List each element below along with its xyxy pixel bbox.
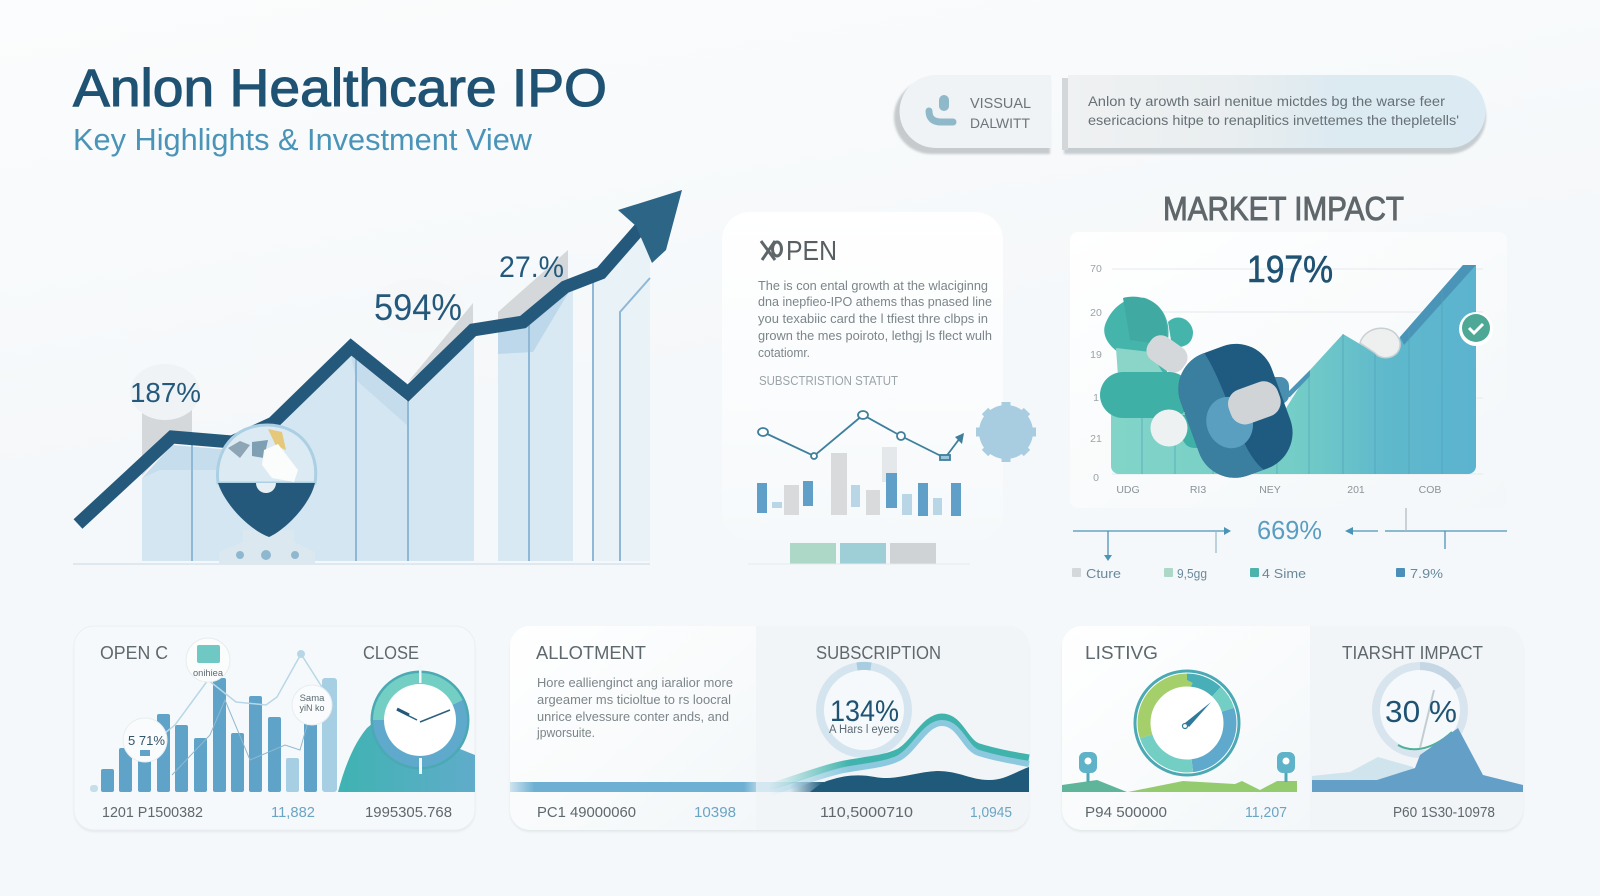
x axis labels <box>1116 484 1441 496</box>
figures: 11,207 <box>1245 804 1287 821</box>
legend: 4 Sime <box>1262 566 1306 581</box>
paragraph: you texabiic card the l tfiest thre clbps in <box>758 312 988 326</box>
figures: 1201 P1500382 <box>102 804 203 821</box>
x axis labels: UDG <box>1116 484 1140 496</box>
icon: clock <box>372 665 468 774</box>
label: listing: LISTIVG <box>1085 643 1158 663</box>
paragraph: Hore eallienginct ang iaralior more <box>537 676 733 690</box>
subheading: SUBSCTRISTION STATUT <box>759 374 898 388</box>
area bars <box>142 218 650 561</box>
mountain chart <box>1312 690 1523 792</box>
icon: pin emblem <box>218 425 316 564</box>
arrows <box>1073 508 1507 561</box>
bar chart: open <box>90 650 337 792</box>
y axis labels: 1 <box>1093 392 1099 404</box>
figures <box>537 804 1012 821</box>
figures: 11,882 <box>271 804 315 821</box>
panel: open <box>722 212 1003 564</box>
label: close: CLOSE <box>363 643 419 663</box>
wave chart <box>769 717 1029 793</box>
figures: 110,5000710 <box>820 804 913 821</box>
legend: Cture <box>1086 566 1121 581</box>
paragraph: grown the mes poiroto, lethgj ls flect wulh <box>758 329 992 343</box>
badge: 27%: 27.% <box>499 251 564 284</box>
label: target impact: TIARSHT IMPACT <box>1342 643 1483 663</box>
paragraph: unrice elvessure conter ands, and <box>537 710 729 724</box>
callout bubble: top <box>186 638 230 682</box>
ground <box>1062 780 1127 792</box>
paragraph <box>758 279 992 360</box>
paragraph <box>536 676 733 740</box>
paragraph: The is con ental growth at the wlaciginng <box>758 279 988 293</box>
y axis labels: 0 <box>1093 472 1099 484</box>
icon: phone <box>929 100 953 122</box>
ring: 134% <box>820 666 908 754</box>
y axis labels: 20 <box>1090 307 1102 319</box>
bar chart: subscription <box>757 447 961 516</box>
arrow head <box>618 190 682 263</box>
paragraph: dna inepfieo-IPO athems thas pnased line <box>758 295 992 309</box>
pill text <box>1088 94 1459 128</box>
x axis labels: 201 <box>1347 484 1365 496</box>
y axis labels: 19 <box>1090 349 1102 361</box>
chart: main growth line <box>73 190 682 564</box>
figures: PC1 49000060 <box>537 804 636 821</box>
heading: open: PEN <box>786 235 837 266</box>
callout bubble: right <box>292 685 332 725</box>
value: 669%: 669% <box>1257 515 1322 545</box>
progress bar <box>510 782 756 792</box>
callout bubble: top: onihiea <box>193 668 223 678</box>
figures: 1995305.768 <box>365 804 452 821</box>
ring: 134%: 134% <box>830 695 899 728</box>
figures: P60 1S30-10978 <box>1393 804 1495 821</box>
pill label <box>970 95 1031 131</box>
gray wedges <box>142 250 568 476</box>
swatches <box>748 543 970 564</box>
panel: listing / target impact <box>1062 626 1523 832</box>
icon: open glyph <box>761 241 782 260</box>
badge: 594%: 594% <box>374 287 462 328</box>
callout bubble: left: 5 71% <box>128 733 165 748</box>
y axis labels: 21 <box>1090 433 1102 445</box>
pill label: DALWITT <box>970 115 1030 131</box>
figures <box>1085 804 1495 821</box>
line chart: subscription <box>758 411 964 460</box>
icon: left pin <box>1079 752 1097 782</box>
icon: dark capsule <box>1168 333 1303 488</box>
badge: 187% <box>130 364 201 420</box>
x axis labels: NEY <box>1259 484 1281 496</box>
pill text: esericacions hitpe to renaplitics invettemes the thepletells' <box>1088 113 1459 128</box>
y axis labels: 70 <box>1090 263 1102 275</box>
badge: 187%: 187% <box>130 377 201 408</box>
callout bubble: left <box>123 718 167 762</box>
figures: 10398 <box>694 804 736 821</box>
subtitle: Key Highlights & Investment View <box>73 122 533 157</box>
icon: right pin <box>1277 752 1295 782</box>
panel: market impact chart <box>1070 232 1507 581</box>
legend: 7.9% <box>1410 566 1443 581</box>
paragraph: cotatiomr. <box>758 346 810 360</box>
icon: gear <box>976 402 1036 462</box>
pill text: Anlon ty arowth sairl nenitue mictdes bg the warse feer <box>1088 94 1446 109</box>
paragraph: jpworsuite. <box>536 726 595 740</box>
figures: P94 500000 <box>1085 804 1167 821</box>
label: subscription: SUBSCRIPTION <box>816 643 941 663</box>
title: Anlon Healthcare IPO <box>73 59 607 118</box>
figures: 1,0945 <box>970 804 1012 821</box>
x axis labels: RI3 <box>1190 484 1206 496</box>
icon: check badge <box>1459 312 1493 346</box>
ring: 134%: A Hars l eyers <box>829 724 899 736</box>
figures <box>102 804 452 821</box>
trend line <box>78 225 643 524</box>
area chart <box>1111 265 1476 474</box>
icon: teal capsules <box>1100 297 1215 448</box>
value: 197%: 197% <box>1247 249 1333 291</box>
callout bubble: right: Sama <box>300 693 325 704</box>
value: 30%: 30 % <box>1385 694 1457 729</box>
y axis labels <box>1090 263 1102 484</box>
callout bubble: right: yiN ko <box>299 703 325 713</box>
icon: bump <box>1360 328 1400 358</box>
callout: header pill <box>894 75 1486 154</box>
paragraph: argeamer ms ticioltue to rs loocral <box>537 693 731 707</box>
gauge <box>1135 671 1239 775</box>
x axis labels: COB <box>1419 484 1441 496</box>
legend: 9,5gg <box>1177 566 1207 581</box>
pill label: VISSUAL <box>970 95 1031 112</box>
label: open: OPEN C <box>100 643 168 663</box>
panel: open / close <box>74 626 475 832</box>
heading: market impact: MARKET IMPACT <box>1163 190 1404 227</box>
legend <box>1072 566 1443 581</box>
hill <box>338 700 475 792</box>
ring: 30% <box>1376 666 1464 754</box>
label: allotment: ALLOTMENT <box>536 643 646 663</box>
panel: allotment / subscription <box>510 626 1029 832</box>
